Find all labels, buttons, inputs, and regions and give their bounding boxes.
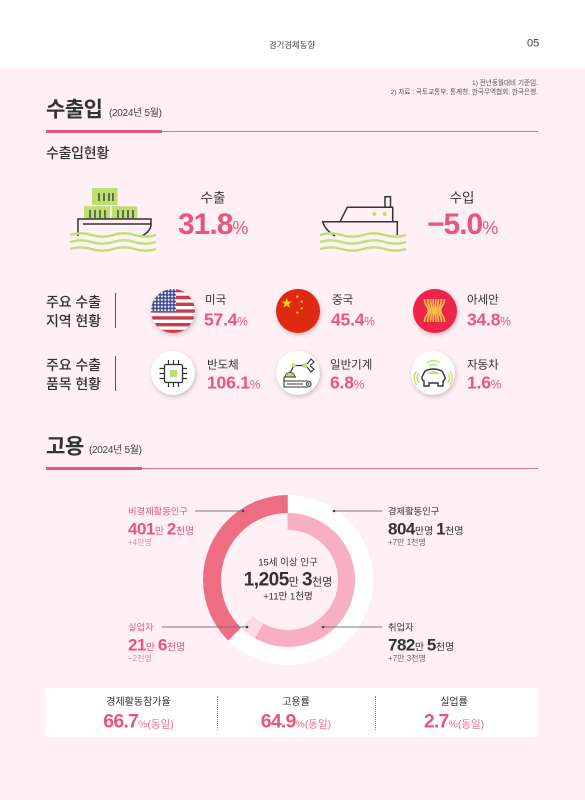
section title: employment: [46, 436, 142, 458]
center caption: 15세 이상 인구: [258, 557, 318, 568]
icon: automobile: [410, 351, 458, 399]
row label: export items: 주요 수출: [46, 357, 101, 373]
value: 804만명 1천명: [388, 520, 463, 538]
value: semiconductor: 106.1%: [207, 372, 260, 392]
page header band: [0, 0, 585, 68]
change: +7만 1천명: [388, 538, 426, 546]
value: export: 31.8%: [178, 208, 248, 241]
callout: unemployed: [128, 622, 185, 662]
label: machinery: 일반기계: [330, 359, 372, 371]
donut center text: [244, 557, 332, 602]
footnotes: 2) 자료 : 국토교통부; 통계청; 한국무역협회; 한국은행.: [391, 89, 538, 96]
change: +7만 3천명: [388, 654, 426, 662]
row label: export regions: [46, 293, 116, 329]
section title: trade: [46, 98, 162, 122]
value: machinery: 6.8%: [330, 372, 364, 392]
icon: machinery: [275, 351, 323, 399]
icon: China flag: [275, 289, 323, 337]
callout: economically inactive: [128, 506, 194, 546]
label: USA: 미국: [205, 294, 226, 306]
value: 782만 5천명: [388, 636, 454, 654]
rate: participation: [103, 696, 174, 732]
label: export: 수출: [201, 190, 225, 205]
label: 경제활동인구: [388, 506, 439, 516]
footnotes: [390, 79, 538, 96]
label: 고용률: [282, 697, 310, 708]
section rule: trade: [46, 130, 538, 133]
value: 2.7%(동일): [424, 710, 484, 732]
center change: +11만 1천명: [263, 591, 313, 602]
label: 취업자: [388, 622, 414, 632]
subheading: 수출입현황: [46, 145, 109, 161]
label: 실업자: [128, 622, 154, 632]
footnotes: 1) 전년동월대비 기준임.: [472, 80, 538, 87]
rate: employment: [261, 696, 331, 732]
callout: employed: [388, 622, 454, 662]
header title: 경기경제동향: [269, 40, 315, 50]
page number: 05: [527, 38, 539, 50]
icon: USA flag: [150, 289, 198, 337]
date: (2024년 5월): [109, 108, 162, 119]
row label: export items: 품목 현황: [46, 376, 101, 392]
rate: unemployment: [424, 696, 484, 732]
change: +4만명: [128, 538, 152, 546]
label: 경제활동참가율: [106, 697, 171, 708]
section rule: employment: [46, 467, 538, 470]
value: China: 45.4%: [331, 309, 374, 329]
heading: 고용: [46, 436, 84, 458]
change: −2천명: [128, 654, 152, 662]
value: USA: 57.4%: [204, 309, 247, 329]
value: 64.9%(동일): [261, 710, 331, 732]
label: 실업률: [440, 697, 468, 708]
value: 66.7%(동일): [103, 710, 174, 732]
icon: semiconductor: [150, 351, 198, 399]
label: automobile: 자동차: [467, 359, 499, 371]
icon: export ship: [70, 188, 156, 252]
label: 비경제활동인구: [128, 506, 188, 516]
row label: export regions: 주요 수출: [46, 294, 101, 310]
panel: employment rates: [46, 688, 538, 737]
label: import: 수입: [450, 190, 474, 205]
label: China: 중국: [332, 294, 353, 306]
icon: ASEAN emblem: [412, 289, 460, 337]
row label: export regions: 지역 현황: [46, 313, 101, 329]
value: 21만 6천명: [128, 636, 185, 654]
center value: 1,205만 3천명: [244, 570, 332, 590]
date: (2024년 5월): [89, 445, 142, 456]
icon: import ship: [320, 196, 406, 252]
value: 401만 2천명: [128, 520, 194, 538]
row label: export items: [46, 356, 116, 392]
value: ASEAN: 34.8%: [467, 309, 510, 329]
value: automobile: 1.6%: [467, 372, 501, 392]
label: ASEAN: 아세안: [467, 294, 499, 306]
heading: 수출입: [46, 98, 102, 122]
callout: economically active: [388, 506, 463, 546]
value: import: −5.0%: [427, 208, 498, 241]
label: semiconductor: 반도체: [207, 359, 239, 371]
